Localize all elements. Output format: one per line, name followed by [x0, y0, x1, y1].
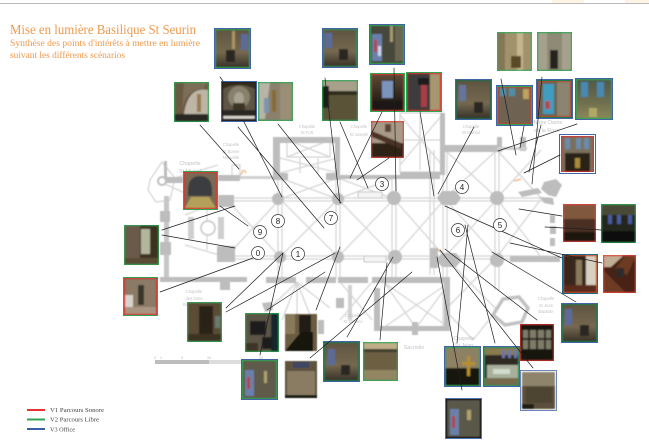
chapel labels: Chapelle: [223, 142, 240, 147]
leader lines: [160, 68, 602, 390]
chapel labels: St Bonne: [222, 149, 240, 154]
photo: carved stone pillar: [497, 32, 532, 71]
photo: central nave: [221, 81, 257, 122]
photo: reliquary panels: [520, 324, 554, 361]
photo: high altar: [483, 346, 520, 387]
photo: red statue: [406, 72, 442, 112]
photo: pulpit: [285, 314, 317, 351]
chapel labels: Chapelle: [538, 296, 555, 301]
numbered markers: 9: [258, 228, 263, 237]
chapel labels: des fonts: [186, 296, 202, 301]
numbered markers: 7: [329, 214, 334, 223]
scale bar: 20: [259, 356, 263, 360]
photo: pillar and bright door: [124, 225, 159, 265]
photo: carved detail: [603, 255, 636, 293]
photo: baptismal chapel arch: [187, 302, 222, 342]
photo: side altar with candles: [562, 254, 598, 294]
chapel labels: Baptismaux: [183, 302, 206, 307]
scale bar: 0: [154, 356, 156, 360]
photo: golden cross: [444, 346, 481, 387]
chapel labels: Chapelle: [463, 124, 480, 129]
photo: sculpted doorway: [537, 32, 572, 71]
chapel labels: Chapelle: [345, 313, 362, 318]
scale bar: 1: [160, 356, 162, 360]
numbered markers: 0: [256, 249, 261, 258]
photo: aisle window, blue and green frame: [323, 341, 360, 382]
numbered markers: 5: [498, 221, 503, 230]
chapel labels: Chapelle: [186, 289, 203, 294]
title block: Mise en lumière Basilique St Seurin: [10, 22, 196, 37]
numbered markers: 1: [296, 250, 301, 259]
chapel labels: St Jean: [455, 343, 473, 349]
photo: dark choir windows: [601, 204, 636, 243]
legend: [27, 407, 104, 434]
scale bar: [154, 356, 263, 364]
photo: high windows: [496, 85, 533, 126]
photo: stone tomb: [520, 370, 557, 411]
title block: [10, 22, 200, 60]
legend: V1 Parcours Sonore: [50, 407, 104, 414]
chapel labels: Chapelle: [179, 161, 201, 167]
photo: choir stalls: [563, 204, 596, 242]
photo: lower aisle window: [561, 303, 598, 343]
title block: Synthèse des points d'intérêts à mettre en lumière: [10, 38, 200, 48]
scale bar: 5: [181, 356, 183, 360]
chapel labels: St Etienne: [343, 319, 363, 324]
photo: two tall windows: [575, 78, 613, 120]
chapel labels: Notre Dame: [533, 120, 563, 126]
legend: V2 Parcours Libre: [50, 416, 99, 424]
chapel labels: St Fort: [301, 130, 314, 135]
chapel labels: St Jean: [539, 303, 554, 308]
chapel labels: [179, 120, 563, 351]
numbered markers: 8: [276, 217, 281, 226]
numbered markers: 3: [380, 180, 385, 189]
photo: side chapel with bench: [371, 121, 404, 158]
chapel labels: Chapelle: [453, 336, 475, 342]
photo: entrance hall: [123, 277, 158, 316]
photo: statue by window: [258, 82, 293, 121]
top rule: [0, 3, 649, 4]
chapel labels: Chapelle: [299, 124, 316, 129]
chapel labels: St Martial: [462, 130, 480, 135]
scale bar: 10: [207, 356, 211, 360]
photo: arch and window, blue and green frame: [455, 79, 492, 120]
chapel labels: Nouvelle: [223, 155, 240, 160]
photo: nave window, blue and green frame: [322, 28, 358, 68]
apse masses: [541, 179, 562, 197]
photo: bright stained glass: [536, 79, 573, 119]
floor plan of the basilica: [148, 113, 563, 364]
chapel labels: de la Rose: [534, 128, 560, 134]
transept walls: [273, 137, 340, 143]
chapel labels: Chapelle: [351, 124, 368, 129]
photo: lower stained glass: [445, 398, 482, 439]
photo: wood panelling: [322, 80, 358, 121]
numbered markers: [252, 178, 506, 260]
chapel labels: St Joseph: [350, 132, 369, 137]
chapel labels: Sacristie: [404, 345, 424, 351]
photo: painting and plaque: [245, 313, 279, 352]
numbered markers: 4: [460, 183, 465, 192]
numbered markers: 6: [456, 226, 461, 235]
orange light markers: [241, 170, 521, 252]
chapel labels: St Michel: [179, 169, 201, 175]
chapel labels: Baptiste: [538, 309, 554, 314]
photo: upper nave window: [214, 28, 251, 69]
photo: choir balustrade: [363, 342, 398, 381]
photo: lower left stained glass: [241, 359, 278, 400]
title block: suivant les différents scénarios: [10, 50, 125, 60]
photo: altar with windows: [559, 134, 596, 174]
photo: vault and arch: [174, 82, 209, 122]
photo: organ: [183, 171, 218, 210]
photo: chapel window at dusk: [370, 73, 405, 112]
legend: V3 Office: [50, 426, 75, 434]
photo: wall memorial: [285, 361, 317, 398]
photo: stained glass window: [369, 24, 405, 65]
